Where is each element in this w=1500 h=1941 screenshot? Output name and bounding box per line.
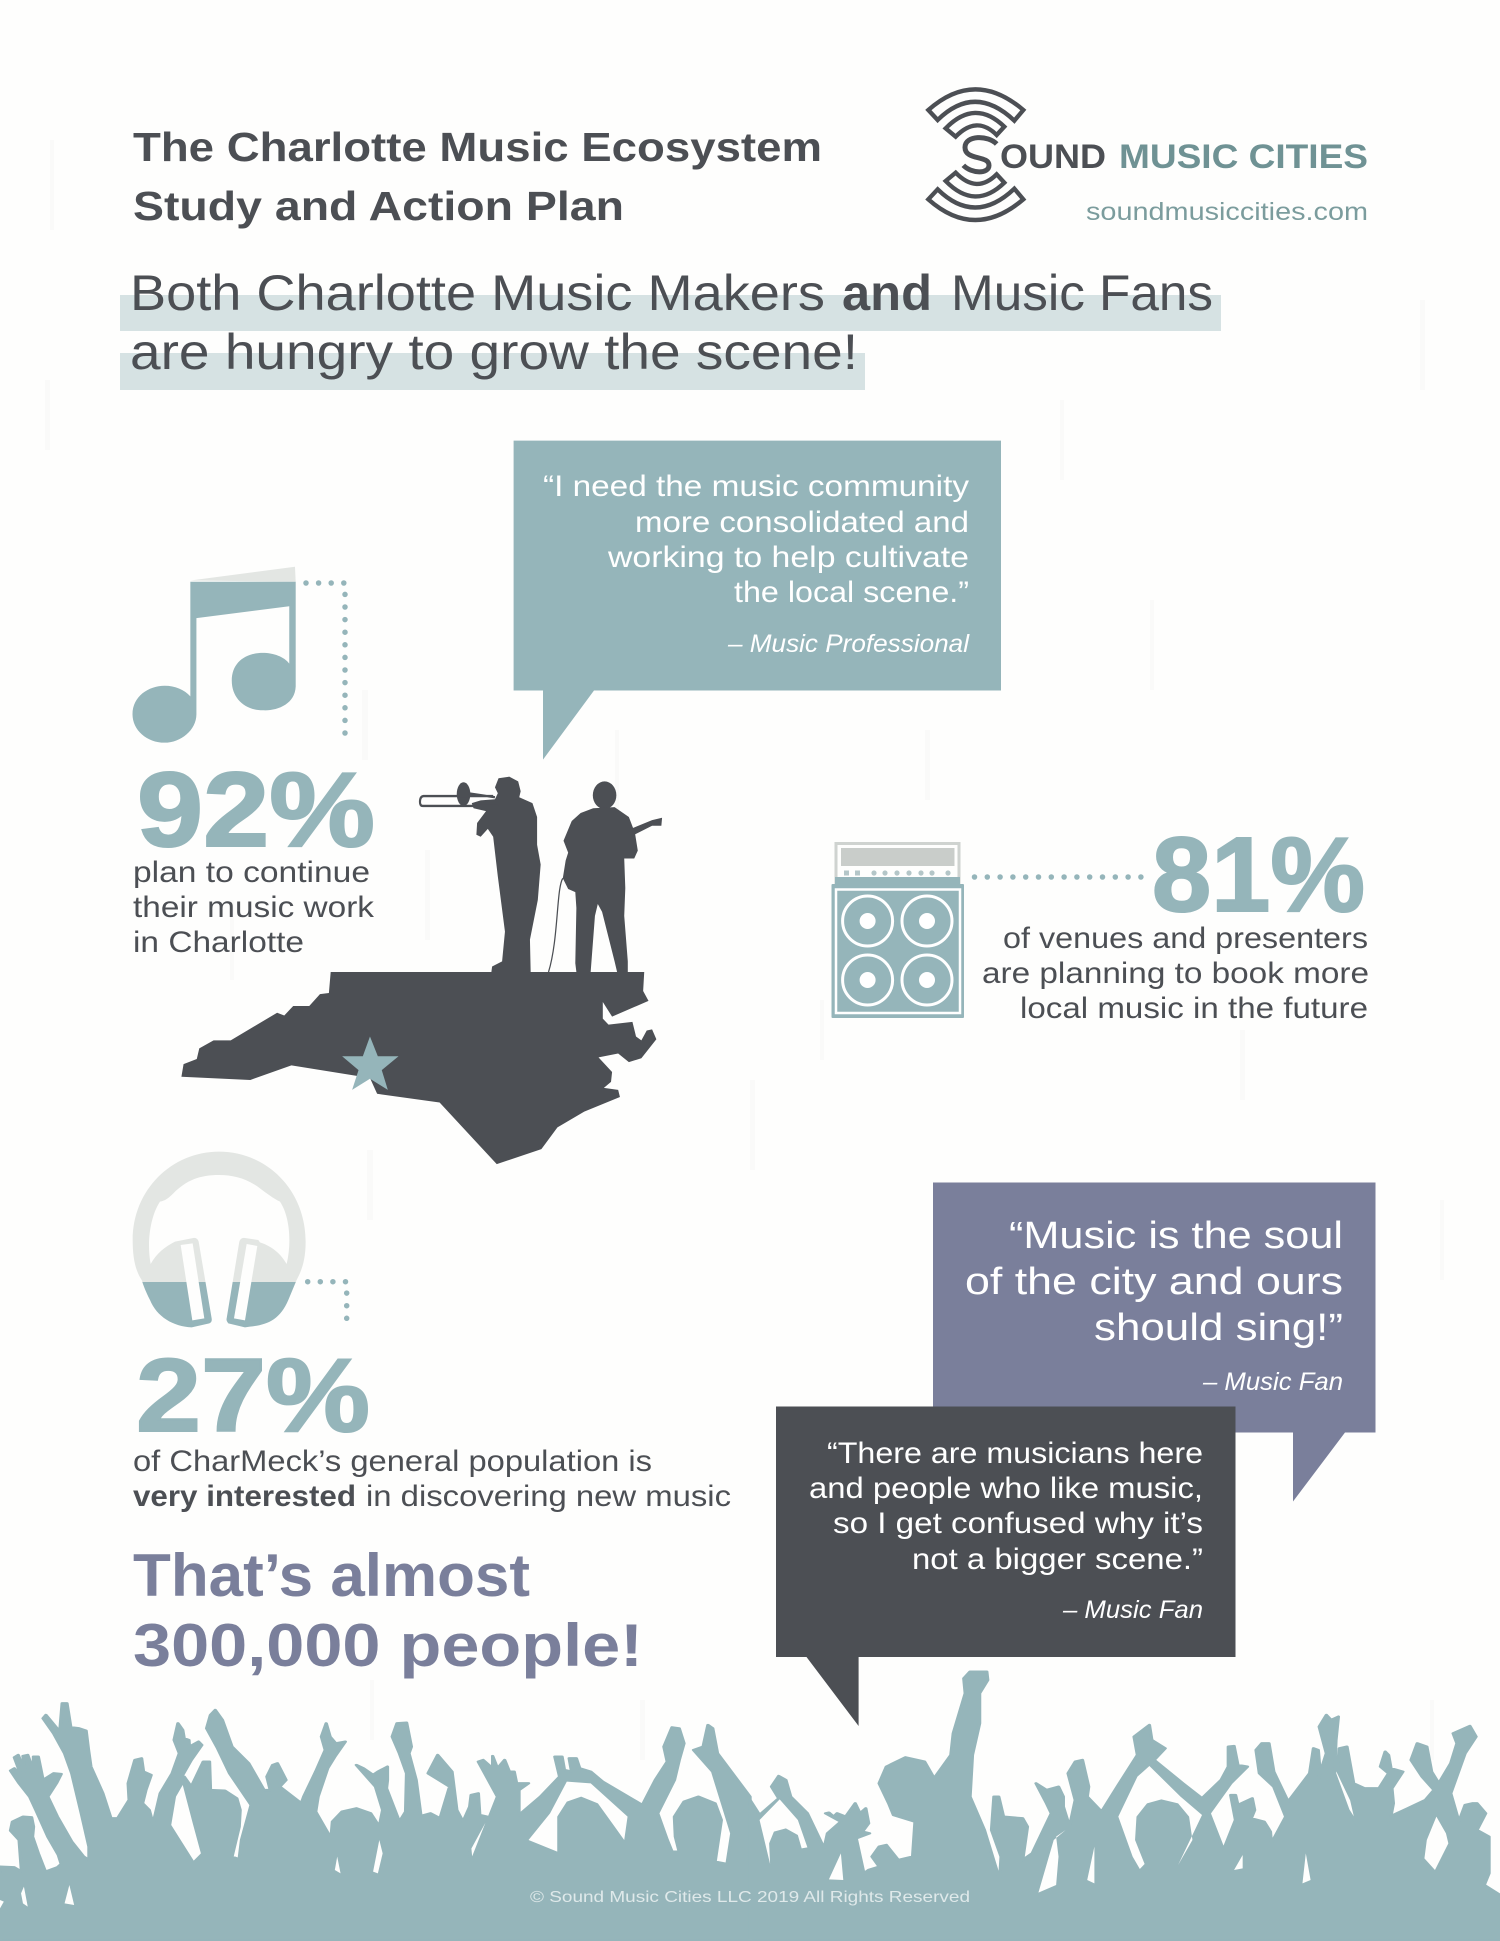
speech bubble: music professional: – Music Professional [727,630,971,658]
81 percent description: of venues and presenters [1003,922,1368,955]
headline with highlight bars [120,265,1221,390]
icon: guitar amplifier [832,844,964,1018]
speech bubble: music fan, dark [776,1406,1236,1726]
92 percent description [133,856,375,959]
81 percent description: local music in the future [1020,992,1368,1025]
speech bubble: music professional: “I need the music community [543,470,969,503]
map of North Carolina [181,972,656,1164]
stat: 27 percent [133,1152,731,1679]
92 percent description: plan to continue [133,856,370,889]
92 percent number: 92% [137,751,375,869]
icon: music note [132,567,296,743]
speech bubble: music fan, purple: should sing!” [1094,1307,1343,1349]
81 percent description: are planning to book more [982,957,1369,990]
illustration: musicians on North Carolina map [181,777,662,1164]
title [133,124,822,229]
icon: headphones [133,1152,306,1327]
speech bubble: music fan, purple: “Music is the soul [1009,1215,1343,1257]
speech bubble: music fan, dark: so I get confused why it’s [833,1507,1203,1540]
icon: sound wave S [928,89,1023,220]
speech bubble: music fan, purple: of the city and ours [965,1261,1343,1303]
logo wordmark: OUND [1000,138,1106,176]
81 percent number: 81% [1152,816,1365,934]
27 percent description: in discovering new music [366,1480,731,1513]
callout: almost 300,000 people [133,1542,643,1679]
title: Study and Action Plan [133,183,624,229]
speech bubble: music fan, dark: “There are musicians here [827,1437,1203,1470]
crowd silhouette [0,1672,1500,1941]
silhouette: guitar player [549,781,662,972]
speech bubble: music professional: the local scene.” [734,576,969,609]
logo url: soundmusiccities.com [1086,198,1368,226]
speech bubble: music fan, purple: – Music Fan [1202,1368,1343,1396]
logo wordmark: MUSIC CITIES [1119,138,1368,176]
92 percent description: their music work [133,891,375,924]
speech bubble: music professional [514,441,1001,760]
81 percent description [982,922,1369,1025]
stat: 92 percent [132,567,375,959]
speech bubble: music fan, dark: – Music Fan [1062,1596,1203,1624]
logo wordmark [1000,138,1368,176]
logo: Sound Music Cities [928,89,1368,226]
icon: Charlotte star [342,1036,399,1090]
headline with highlight bars: Music Fans [951,265,1213,321]
speech bubble: music fan, purple [933,1182,1376,1502]
92 percent description: in Charlotte [133,926,304,959]
silhouette: trombone player [420,777,541,972]
headline with highlight bars: and [842,265,932,321]
headline with highlight bars: are hungry to grow the scene! [130,324,858,380]
headline with highlight bars: Both Charlotte Music Makers [130,265,825,321]
speech bubble: music fan, dark: and people who like music, [809,1472,1203,1505]
27 percent description: of CharMeck’s general population is [133,1445,652,1478]
27 percent description: very interested [133,1480,356,1513]
copyright footer: © Sound Music Cities LLC 2019 All Rights Reserved [530,1889,970,1906]
speech bubble: music fan, dark: not a bigger scene.” [912,1543,1203,1576]
27 percent number: 27% [136,1338,370,1454]
speech bubble: music professional: working to help cultivate [607,541,969,574]
speech bubble: music professional: more consolidated and [635,506,969,539]
stat: 81 percent [832,816,1369,1025]
27 percent description [133,1445,731,1513]
title: The Charlotte Music Ecosystem [133,124,822,170]
callout: almost 300,000 people: 300,000 people! [133,1612,643,1679]
callout: almost 300,000 people: That’s almost [133,1542,530,1609]
